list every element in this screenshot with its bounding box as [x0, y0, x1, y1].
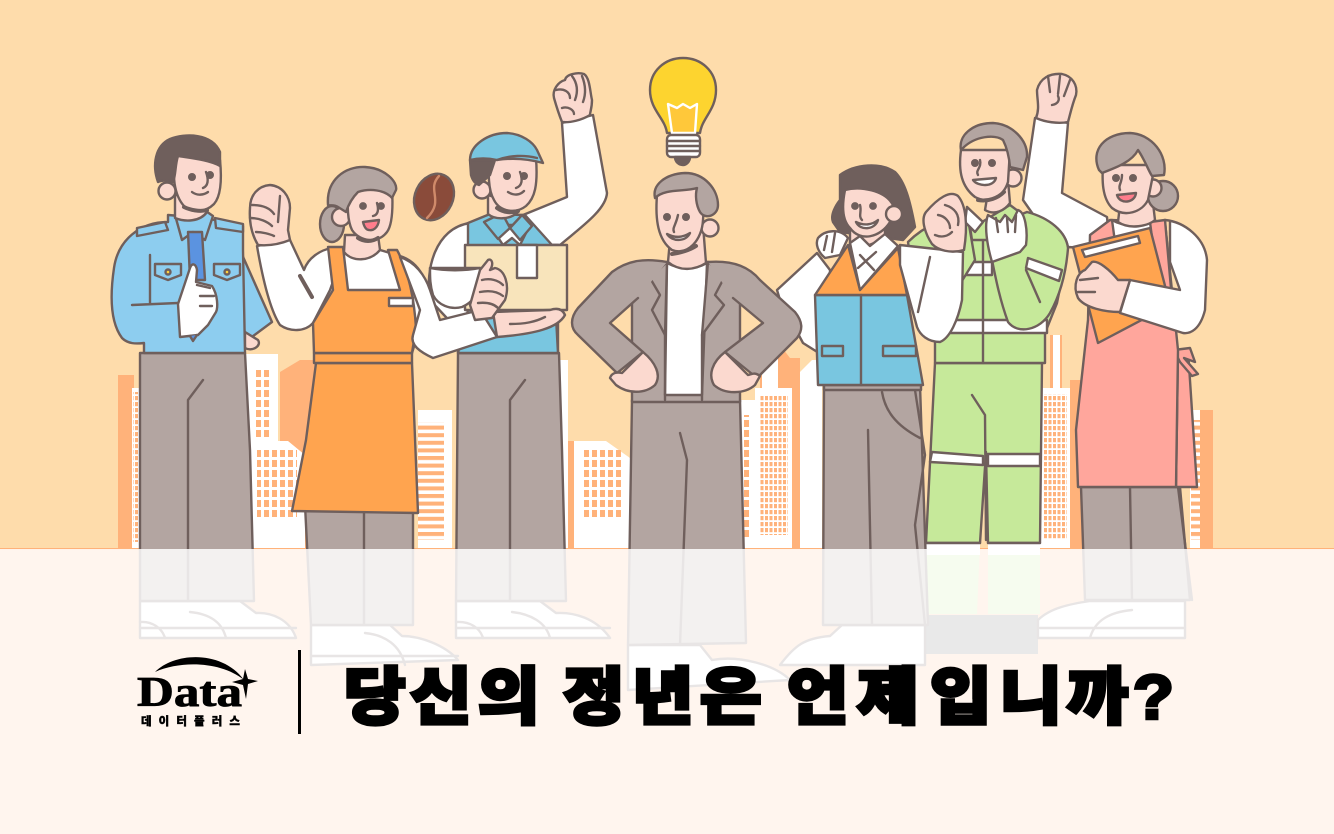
figure: security guard: [112, 135, 296, 638]
right sleeve: [400, 257, 497, 358]
apron tail: [1176, 350, 1197, 487]
title: 언제입니까?: [787, 663, 1174, 732]
logo: Data plus: Data: [137, 670, 242, 716]
figure: delivery worker: [429, 73, 610, 638]
raised arm: [520, 115, 607, 245]
icon: coffee bean: [407, 167, 461, 227]
figure: barista: [250, 167, 507, 665]
fist: [924, 194, 966, 252]
right arm: [708, 262, 801, 378]
vest: [815, 295, 923, 385]
apron: [1076, 220, 1178, 487]
left arm: [572, 260, 667, 373]
logo: Data plus: [137, 657, 258, 728]
title: 정년은: [563, 663, 762, 732]
figure: man in suit: [572, 173, 801, 690]
neck: [1118, 195, 1155, 226]
icon: lightbulb: [650, 58, 716, 165]
bun and hair: [320, 206, 344, 242]
figure: older woman raised arm: [1023, 74, 1110, 250]
bun: [1148, 181, 1178, 211]
logo: Data plus: 데이터플러스: [141, 714, 240, 728]
hand holding cup: [470, 260, 507, 320]
front sleeve: [900, 245, 963, 342]
figure: woman with clipboard: [1038, 133, 1207, 638]
ground: [0, 549, 1334, 834]
sleeve: [1120, 220, 1207, 333]
title: [344, 663, 1174, 732]
hair: [832, 166, 915, 240]
figure: green worker: [908, 123, 1068, 654]
raised fist: [554, 73, 592, 122]
hands on hips: [610, 352, 658, 392]
title: 당신의: [344, 663, 540, 732]
translucent lower panel: [0, 549, 1334, 834]
figure: woman with vest: [780, 166, 966, 665]
left fist: [250, 185, 290, 245]
collar: [850, 234, 898, 290]
clipboard: [1073, 228, 1170, 343]
coffee cup: [430, 268, 480, 308]
figure: colleague back arm: [777, 231, 848, 360]
character illustrations: [112, 58, 1207, 690]
divider: [298, 650, 301, 734]
hand on clipboard: [1076, 262, 1130, 312]
city skyline: [0, 335, 1334, 550]
left sleeve and shirt: [257, 240, 345, 330]
head: [668, 225, 706, 269]
